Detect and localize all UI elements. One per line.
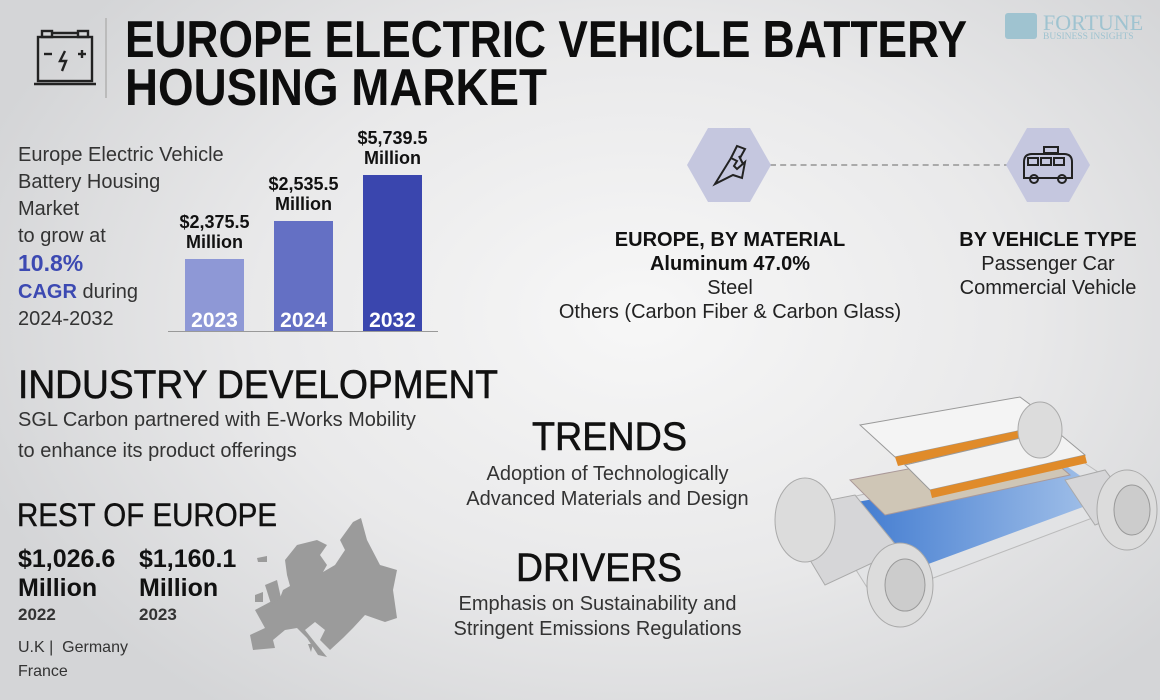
stat 2023: 2023 — [139, 605, 177, 624]
title — [125, 11, 967, 110]
stat 2022: Million — [18, 574, 97, 602]
bar chart: Million — [275, 194, 332, 214]
text: market growth: CAGR during — [18, 281, 138, 303]
illustration: ev chassis with battery — [774, 396, 1158, 628]
map: europe — [250, 518, 397, 657]
text: countries: France — [18, 663, 68, 680]
stat 2022 — [18, 545, 115, 624]
text: countries: U.K | Germany — [18, 639, 128, 656]
bar chart — [168, 128, 438, 332]
logo: FORTUNE — [1043, 10, 1143, 35]
text: by material: Aluminum 47.0% — [650, 253, 810, 275]
text: by vehicle type: BY VEHICLE TYPE — [959, 229, 1137, 251]
text: market growth: 2024-2032 — [18, 308, 114, 330]
text: drivers: Stringent Emissions Regulations — [454, 618, 741, 640]
bar chart: 2032 — [369, 309, 416, 332]
text: market growth: to grow at — [18, 225, 106, 247]
text: trends: Adoption of Technologically — [486, 463, 729, 485]
text: market growth: Battery Housing — [18, 171, 160, 193]
stat 2022: 2022 — [18, 605, 56, 624]
text: market growth: Europe Electric Vehicle — [18, 144, 224, 166]
text: industry development: SGL Carbon partnered with E-Works Mobility — [18, 409, 416, 431]
bar chart: Million — [364, 148, 421, 168]
dashed connector — [770, 164, 1010, 166]
text: by vehicle type — [959, 229, 1137, 299]
text: by material: Others (Carbon Fiber & Carbon Glass) — [559, 301, 901, 323]
text: trends: Advanced Materials and Design — [466, 488, 749, 510]
text: market growth: 10.8% — [18, 250, 83, 276]
text: market growth — [18, 144, 224, 330]
icon: rail hexagon — [687, 128, 771, 202]
text: by material — [559, 229, 901, 323]
icon: van hexagon — [1006, 128, 1090, 202]
bar chart: 2023 — [191, 309, 238, 332]
text: industry development — [18, 409, 416, 462]
text: drivers — [454, 593, 741, 640]
text: by vehicle type: Commercial Vehicle — [960, 277, 1136, 299]
text: drivers: Emphasis on Sustainability and — [459, 593, 736, 615]
bar chart: $2,535.5 — [268, 174, 339, 194]
text: by material: Steel — [707, 277, 753, 299]
bar chart: Million — [186, 232, 243, 252]
logo: BUSINESS INSIGHTS — [1043, 32, 1134, 42]
bar chart: $5,739.5 — [357, 128, 428, 148]
bar chart: 2024 — [280, 309, 327, 332]
text: industry development: to enhance its product offerings — [18, 440, 297, 462]
text: countries — [18, 639, 128, 680]
stat 2023: $1,160.1 — [139, 545, 236, 573]
text: trends — [466, 463, 749, 510]
text: market growth: Market — [18, 198, 79, 220]
stat 2023 — [139, 545, 236, 624]
icon: battery — [34, 30, 96, 86]
divider — [105, 18, 107, 98]
stat 2022: $1,026.6 — [18, 545, 115, 573]
logo — [1005, 10, 1143, 42]
text: by material: EUROPE, BY MATERIAL — [615, 229, 845, 251]
text: by vehicle type: Passenger Car — [981, 253, 1115, 275]
bar chart: $2,375.5 — [179, 212, 250, 232]
stat 2023: Million — [139, 574, 218, 602]
